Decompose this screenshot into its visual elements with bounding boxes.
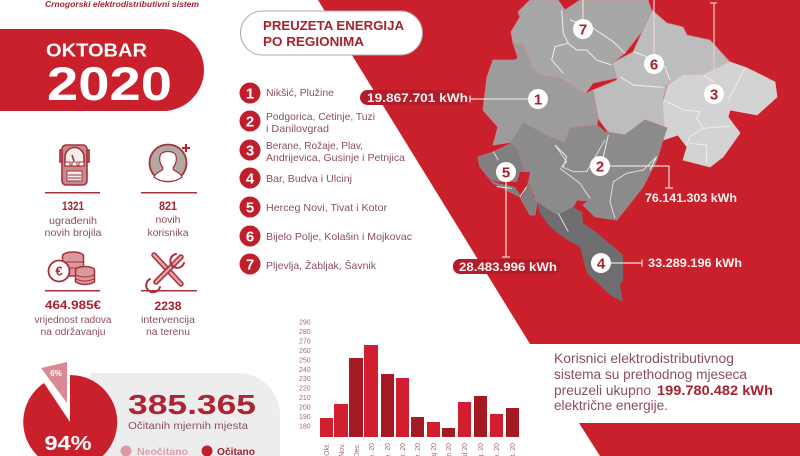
total energy note: električne energije. xyxy=(554,398,668,413)
chart y axis: 220 xyxy=(299,386,311,392)
callout 1 xyxy=(360,89,548,109)
callout 2: 2 xyxy=(596,158,604,176)
stat: new users: korisnika xyxy=(148,227,189,239)
chart y axis: 280 xyxy=(299,329,311,336)
stat: installed meters: ugrađenih xyxy=(49,215,97,227)
stat: installed meters: 1321 xyxy=(62,201,85,213)
date banner: OKTOBAR xyxy=(46,40,147,60)
panel: reading summary xyxy=(23,362,280,456)
header subtitle: Crnogorski elektrodistributivni sistem xyxy=(45,0,199,9)
region 5 xyxy=(478,143,537,215)
chart bars xyxy=(320,345,519,437)
stat: field interventions: na terenu xyxy=(146,326,190,338)
callout 2 xyxy=(590,156,737,205)
stat: new users: 821 xyxy=(159,201,178,213)
callout 4: 33.289.196 kWh xyxy=(648,256,742,270)
total energy note: 199.780.482 kWh xyxy=(657,383,773,398)
stat: new users xyxy=(141,144,197,239)
list item 1: Nikšić, Plužine xyxy=(266,87,334,99)
list item 7: Pljevlja, Žabljak, Šavnik xyxy=(266,259,377,272)
chart y axis: 230 xyxy=(299,376,311,383)
pie chart: read share xyxy=(23,362,117,456)
callout 2: 76.141.303 kWh xyxy=(645,191,737,205)
stat: maintenance value: 464.985€ xyxy=(45,300,102,312)
callout 7 xyxy=(573,0,593,39)
chart y axis: 190 xyxy=(299,414,311,421)
callout 1: 1 xyxy=(534,92,542,108)
list item 1: 1 xyxy=(246,86,254,102)
list item 5: Herceg Novi, Tivat i Kotor xyxy=(266,202,388,214)
chart y axis: 200 xyxy=(299,404,311,412)
region 1 xyxy=(483,43,598,145)
total energy note: Korisnici elektrodistributivnog xyxy=(554,351,734,366)
list item 2: i Danilovgrad xyxy=(266,123,329,135)
list item 5 xyxy=(240,196,388,218)
list item 2 xyxy=(240,110,375,135)
municipal borders xyxy=(552,10,745,170)
stat: maintenance value: vrijednost radova xyxy=(34,314,112,326)
list item 3: 3 xyxy=(246,142,254,160)
red lower band xyxy=(579,423,800,456)
list item 2: Podgorica, Cetinje, Tuzi xyxy=(266,111,375,123)
pie legend xyxy=(120,446,255,456)
pie chart: read share: 6% xyxy=(50,369,62,378)
callout 6 xyxy=(644,0,664,74)
icon: euro coins: € xyxy=(55,264,63,278)
map callouts xyxy=(360,0,742,274)
callout 1: 19.867.701 kWh xyxy=(367,91,468,105)
list item 4 xyxy=(240,168,352,188)
callout 5 xyxy=(453,162,560,274)
stat: field interventions: intervencija xyxy=(141,314,195,326)
date banner xyxy=(0,29,204,111)
list item 6: Bijelo Polje, Kolašin i Mojkovac xyxy=(266,231,412,243)
list item 3: Andrijevica, Gusinje i Petnjica xyxy=(266,152,405,164)
stat: maintenance value xyxy=(34,252,112,338)
pie chart: read share: 94% xyxy=(44,433,92,455)
stat: field interventions: 2238 xyxy=(154,301,182,313)
map of regions xyxy=(478,0,777,302)
chart y axis: 250 xyxy=(299,358,311,364)
stat: installed meters xyxy=(44,145,102,239)
icon: crossed tools xyxy=(146,254,184,292)
callout 7: 7 xyxy=(579,22,587,38)
list item 1 xyxy=(240,82,334,104)
list item 7 xyxy=(240,254,377,274)
bay of Kotor xyxy=(488,172,530,197)
callout 4 xyxy=(591,253,742,273)
list item 6 xyxy=(240,226,412,246)
callout 6: 6 xyxy=(650,56,658,74)
bar chart: monthly energy xyxy=(299,320,519,456)
red diagonal background xyxy=(318,0,800,344)
stat: new users: novih xyxy=(156,214,181,226)
list item 6: 6 xyxy=(246,228,254,246)
chart y axis: 180 xyxy=(299,424,311,430)
date banner: 2020 xyxy=(47,57,172,110)
icon: meter xyxy=(60,145,89,185)
regions heading: PREUZETA ENERGIJA xyxy=(263,18,405,33)
chart x axis xyxy=(324,443,517,456)
stat: maintenance value: na održavanju xyxy=(40,326,106,338)
chart y axis: 290 xyxy=(299,320,311,326)
stat: field interventions xyxy=(141,254,197,338)
total energy note: sistema su prethodnog mjeseca xyxy=(554,367,747,382)
reading caption: Očitanih mjernih mjesta xyxy=(128,420,248,432)
list item 3: Berane, Rožaje, Plav, xyxy=(266,140,363,152)
list item 2: 2 xyxy=(246,114,254,130)
reading count: 385.365 xyxy=(128,389,256,420)
callout 3: 3 xyxy=(710,86,718,104)
region 3 xyxy=(663,62,777,167)
chart y axis: 210 xyxy=(299,395,311,402)
region 2 xyxy=(510,120,667,220)
total energy note xyxy=(554,351,773,413)
total energy note: preuzeli ukupno xyxy=(554,383,651,398)
list item 4: 4 xyxy=(246,170,255,188)
icon: user with plus xyxy=(150,144,190,182)
callout 4: 4 xyxy=(597,256,606,272)
region 7 xyxy=(511,0,652,94)
callout 5: 28.483.996 kWh xyxy=(459,260,557,274)
chart x axis: Okt. xyxy=(324,443,331,456)
list item 4: Bar, Budva i Ulcinj xyxy=(266,173,352,185)
chart y axis: 240 xyxy=(299,367,311,374)
chart y axis: 270 xyxy=(299,338,311,346)
regions heading: PO REGIONIMA xyxy=(263,34,365,49)
list item 3 xyxy=(240,140,405,164)
chart y axis: 260 xyxy=(299,348,311,355)
region 6 xyxy=(593,10,730,135)
callout 5: 5 xyxy=(502,164,510,182)
callout 3 xyxy=(704,3,724,104)
region list xyxy=(240,82,412,274)
stat: installed meters: novih brojila xyxy=(44,227,102,239)
list item 7: 7 xyxy=(246,256,254,274)
regions heading xyxy=(240,11,422,55)
chart y axis xyxy=(299,320,311,430)
list item 5: 5 xyxy=(246,200,254,216)
region 4 xyxy=(537,202,623,302)
